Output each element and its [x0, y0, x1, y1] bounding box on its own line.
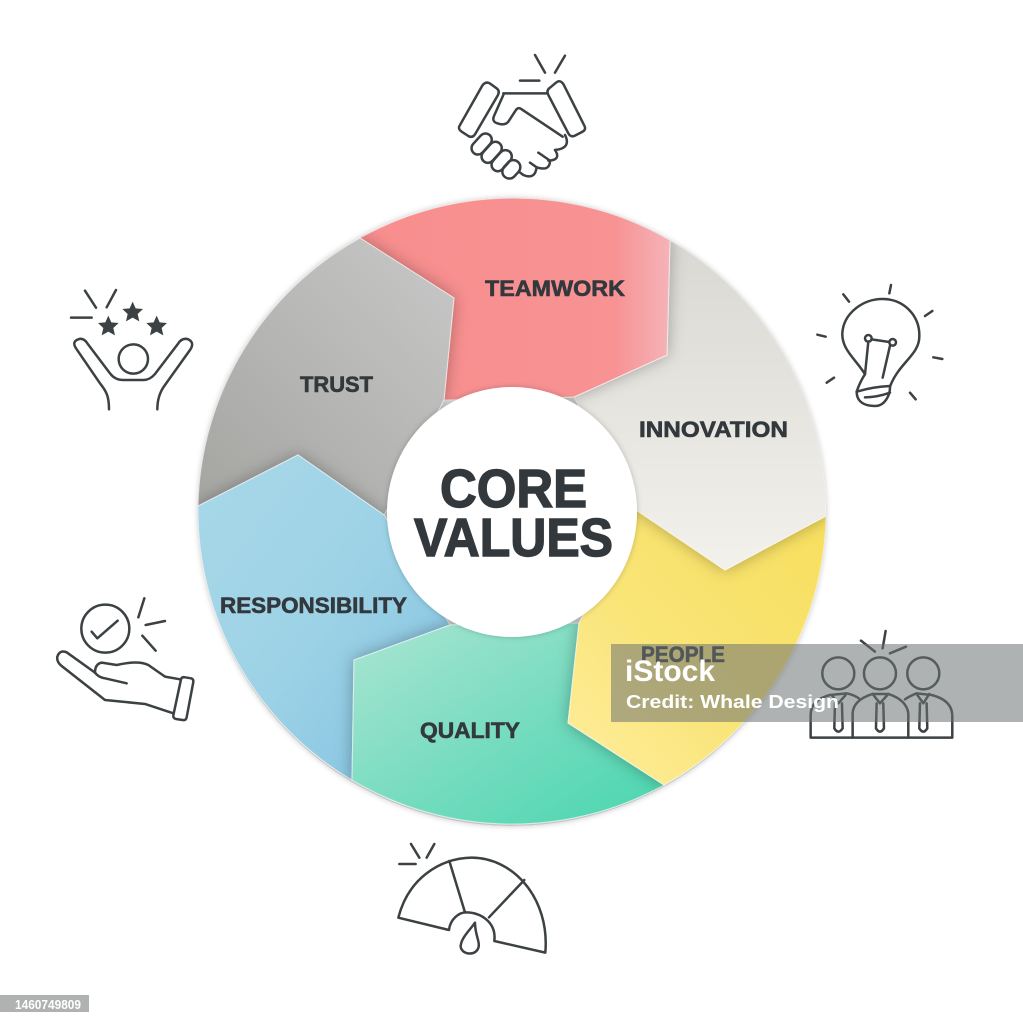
label: teamwork: TEAMWORK [485, 276, 625, 301]
icon: lightbulb [817, 285, 942, 406]
icon: hand with check [57, 598, 193, 720]
segment: quality [352, 623, 664, 824]
label: quality: QUALITY [420, 718, 520, 743]
segment: teamwork right edge over innovation [564, 205, 679, 404]
center circle [387, 387, 637, 637]
label: innovation: INNOVATION [639, 417, 788, 442]
watermark: credit text: Credit: Whale Design [626, 692, 839, 712]
core values wheel [198, 198, 826, 826]
watermark: iStock logo text: iStock [625, 655, 715, 688]
segment: teamwork [360, 198, 670, 400]
segment: responsibility [198, 455, 450, 780]
segment: innovation [574, 240, 826, 570]
label: responsibility: RESPONSIBILITY [220, 593, 407, 618]
segment: people [568, 510, 826, 785]
watermark band [611, 644, 1023, 722]
label: trust: TRUST [300, 372, 374, 397]
icon: raised arms with stars [71, 290, 192, 409]
center title: VALUES [414, 508, 613, 568]
label: people: PEOPLE [641, 642, 725, 667]
stock id tag [0, 995, 89, 1012]
segment: trust [198, 238, 454, 515]
icon: handshake [459, 55, 585, 181]
center title [414, 459, 613, 568]
icon: three people [811, 631, 952, 738]
stars [98, 302, 167, 335]
icon: gauge [398, 844, 546, 954]
stock id tag: 1460749809 [15, 998, 81, 1012]
center title: CORE [440, 459, 587, 519]
